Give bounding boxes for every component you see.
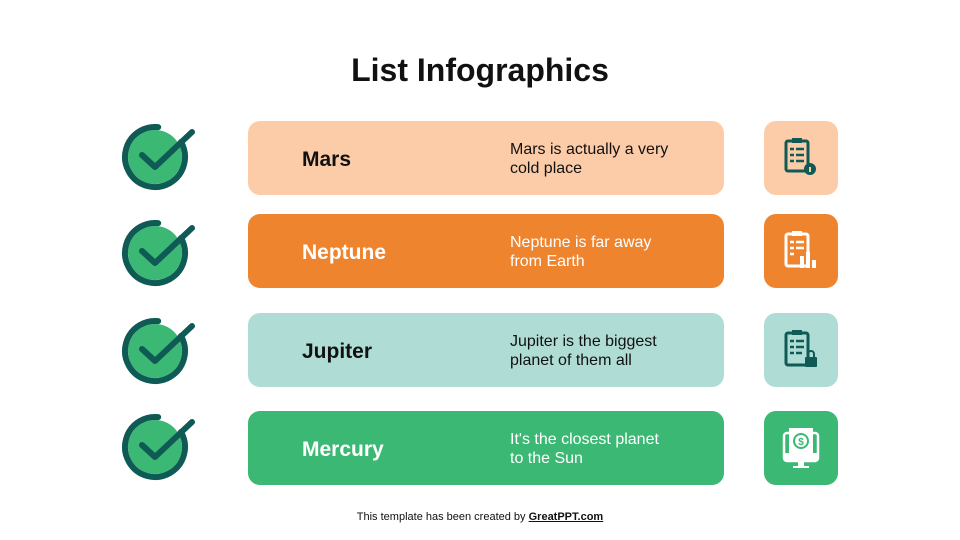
panel: Neptune — [248, 214, 724, 288]
panel: Neptune: Neptune is far away — [510, 234, 651, 251]
panel: Jupiter: Jupiter — [302, 340, 372, 363]
icon: clipboard chart — [764, 214, 838, 288]
check icon 3 — [122, 318, 195, 384]
panel: Mercury — [248, 411, 724, 485]
panel: Mars: Mars — [302, 148, 351, 171]
panel: Mars: cold place — [510, 160, 582, 177]
icon: monitor dollar — [764, 411, 838, 485]
footer credit: This template has been created by GreatPPT.com — [357, 511, 603, 523]
panel: Jupiter — [248, 313, 724, 387]
panel: Mars: Mars is actually a very — [510, 141, 668, 158]
panel: Jupiter: planet of them all — [510, 352, 632, 369]
panel: Mars — [248, 121, 724, 195]
icon: clipboard info — [764, 121, 838, 195]
title: List Infographics — [351, 52, 609, 88]
panel: Mercury: It's the closest planet — [510, 431, 659, 448]
panel: Mercury: to the Sun — [510, 450, 583, 467]
check icon 2 — [122, 220, 195, 286]
panel: Neptune: Neptune — [302, 241, 386, 264]
check icon 4 — [122, 414, 195, 480]
icon: monitor dollar: $ — [798, 437, 804, 448]
icon: clipboard lock — [764, 313, 838, 387]
panel: Neptune: from Earth — [510, 253, 585, 270]
panel: Jupiter: Jupiter is the biggest — [510, 333, 657, 350]
check icon 1 — [122, 124, 195, 190]
panel: Mercury: Mercury — [302, 438, 384, 461]
